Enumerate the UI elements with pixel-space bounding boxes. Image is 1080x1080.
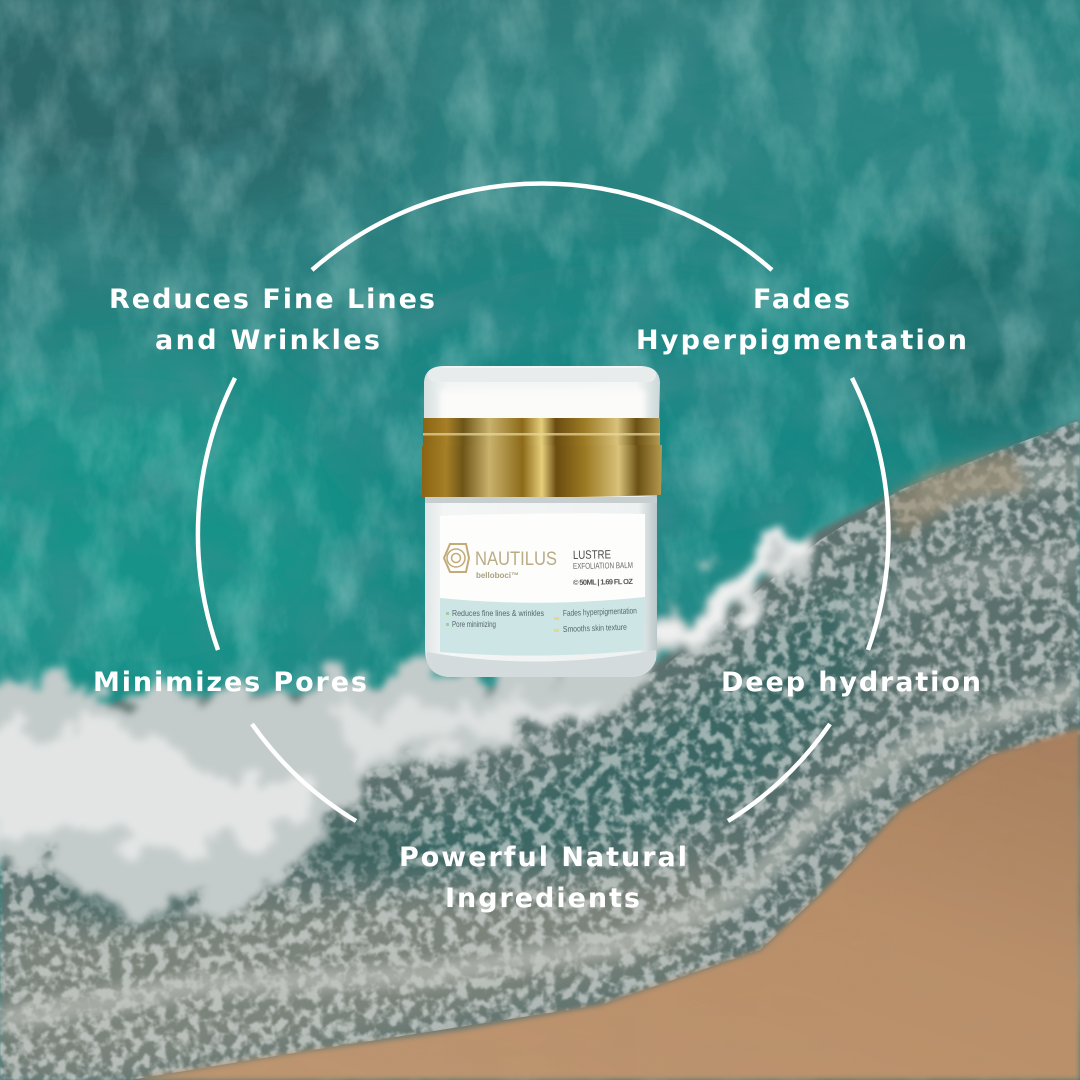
label: Fades Hyperpigmentation [636,284,967,356]
lacy foam [0,421,1080,1080]
gold collar lower [422,445,662,498]
label: Reduces Fine Lines and Wrinkles [109,284,435,356]
gold collar highlights [423,433,660,436]
label teal strip [440,597,645,656]
feature list: Fades hyperpigmentation [563,605,637,618]
label: Fades Hyperpigmentation: Hyperpigmentation [636,325,967,356]
label: Fades Hyperpigmentation: Fades [753,284,850,315]
label white [440,513,645,604]
clear lid [424,366,660,425]
label: Deep hydration: Deep hydration [721,667,981,698]
arc: right [852,378,888,650]
label: Powerful Natural Ingredients [399,842,687,914]
shallow teal pocket [300,560,900,880]
lid inner white [440,390,645,420]
brand sub text: belloboci™ [476,571,519,580]
arc: top [312,183,772,270]
label: Powerful Natural Ingredients: Powerful Natural [399,842,687,873]
jar base tint [427,650,656,677]
logo hexagon [444,544,469,572]
label: Reduces Fine Lines and Wrinkles: Reduces Fine Lines [109,284,435,315]
volume: © 50ML | 1.69 FL OZ [573,577,633,587]
feature list: Smooths skin texture [563,622,627,634]
gold collar upper [423,418,660,446]
feature list [446,605,637,634]
label: Minimizes Pores: Minimizes Pores [93,667,367,698]
brand text: NAUTILUS [475,548,557,570]
wet shallow zone beneath the wave [0,420,1080,1080]
circular frame arcs [198,183,888,821]
product jar [422,366,662,677]
label: Powerful Natural Ingredients: Ingredients [445,883,640,914]
product name: LUSTRE [573,547,611,562]
lid top rim [428,368,656,382]
breaking wave white foam [0,525,810,915]
label: Reduces Fine Lines and Wrinkles: and Wrinkles [155,325,380,356]
sand beach [132,726,1080,1080]
foam along the shoreline [0,470,1080,1020]
feature list: Pore minimizing [452,619,496,629]
lower-left beige foam tint [0,860,740,1080]
collar shadow [425,497,657,503]
product type: EXFOLIATION BALM [573,560,633,571]
feature list: Reduces fine lines & wrinkles [452,608,544,618]
arc: bottom left [252,724,356,821]
shoreline dark water pockets [60,823,410,918]
arc: bottom right [728,724,830,821]
arc: left [198,378,235,650]
jar body [425,495,657,677]
sand edge on right of wave [885,450,1030,540]
